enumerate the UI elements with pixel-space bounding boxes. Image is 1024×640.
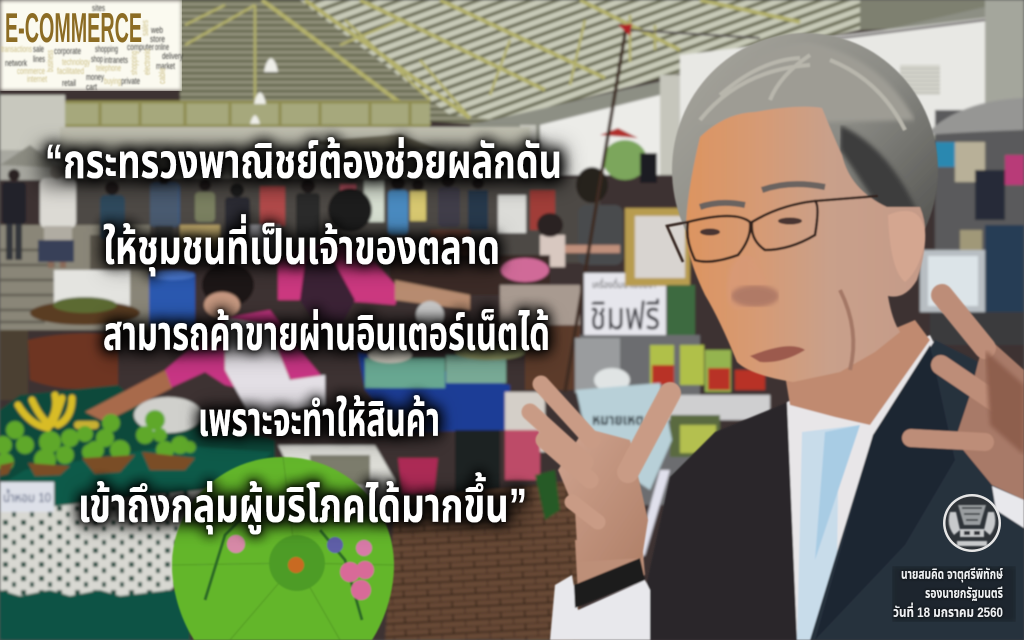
left floor [0,225,150,330]
logo: e-commerce word cloud [0,0,183,92]
blue barrel [149,272,195,328]
pink vendor with apron [85,263,325,433]
quote line 2: ให้ชุมชนที่เป็นเจ้าของตลาด [103,214,500,277]
word cloud words [1,3,183,92]
word cloud words: web [150,25,163,35]
teal sign with text: หมายเหตุ [592,412,644,429]
stall tables mid [390,255,550,295]
shoppers at left [2,165,178,268]
word cloud words: facilitated [57,66,84,76]
credit block [892,566,1016,622]
logo: e-commerce word cloud: E-COMMERCE [5,4,142,51]
roof: gable [178,0,493,126]
roof trusses [185,0,800,125]
free-tasting sign: เครื่องดื่มน้ำเชื่อมชา [592,277,656,291]
text halo bands [40,146,565,528]
vendor woman, right stall [537,167,623,267]
word cloud words: cart [86,82,97,92]
face [686,107,925,382]
word cloud words: online [155,42,169,52]
quote line 5: เข้าถึงกลุ่มผู้บริโภคได้มากขึ้น” [78,472,527,535]
suit: left [636,402,798,640]
tents [1,144,53,168]
crowd band [60,178,600,263]
crowd figures [100,168,555,260]
pink bucket [398,458,438,494]
word cloud words: sales [140,20,150,36]
white crate [278,445,395,520]
right hand [911,295,1024,500]
free-tasting sign: ชิมฟรี [590,296,660,338]
right cuff [992,486,1024,528]
minister figure [530,33,1024,640]
price card: น้ำหอม 10 [3,488,51,505]
pole [565,28,626,392]
word cloud words: market [156,61,175,71]
right stall products [580,335,700,505]
icon: government seal [943,494,1001,552]
glasses [667,196,878,262]
gold framed certificate [625,208,690,286]
word cloud words: corporate [54,46,81,56]
right side stalls [920,98,1024,340]
word cloud words: money [86,72,104,82]
leaves [535,470,560,520]
side wall and beams [468,7,985,141]
quote line 1: “กระทรวงพาณิชย์ต้องช่วยผลักดัน [45,136,562,189]
floor tiles [385,480,580,640]
word cloud words: cable [157,68,167,84]
tie [797,425,860,640]
eyes [700,228,720,236]
word cloud words: retail [62,78,76,88]
word cloud words: internet [27,74,47,84]
word cloud words: sites [92,3,105,13]
blue table and baskets [358,352,510,432]
lower truss [65,101,430,127]
fruit baskets [0,452,195,476]
left hand [530,384,670,562]
headline quote [45,136,562,535]
quote line 4: เพราะจะทำให้สินค้า [198,394,440,447]
word cloud words: shopping [129,51,139,75]
shirt [787,335,935,640]
quote line 3: สามารถค้าขายผ่านอินเตอร์เน็ตได้ [103,308,550,361]
free-tasting sign [584,273,666,338]
woven baskets [30,301,140,325]
word cloud words: electronic [142,49,152,75]
wrist and cuff [550,575,650,640]
neck [785,320,930,425]
flyers under arm [642,468,672,558]
eyebrows [700,184,825,207]
word cloud words: store [150,34,165,44]
word cloud words: telephone [96,63,121,73]
word cloud words: lines [33,54,45,64]
credit date: วันที่ 18 มกราคม 2560 [893,602,1003,620]
price card [0,482,54,512]
teal sign with text [576,383,672,490]
ear [888,211,925,282]
word cloud words: intranets [104,55,128,65]
parasol [172,457,394,640]
word cloud words: sale [33,44,44,54]
word cloud words: technology [62,57,90,67]
hair [672,33,938,307]
bananas and limes [0,395,196,476]
word cloud words: commerce [17,66,45,76]
green basket cloth [0,384,276,481]
parasol flowers [172,457,394,640]
word cloud words: shop [91,54,103,64]
word cloud words: delivery [162,51,183,61]
word cloud words: private [121,76,140,86]
word cloud words: shopping [95,44,118,54]
watch [574,558,645,608]
word cloud words: computer [127,42,154,52]
word cloud words: business [45,50,55,72]
roof: corrugated sheets [300,0,880,120]
suit: right [810,340,1024,640]
lace [0,490,205,596]
word cloud words: network [5,58,27,68]
jars [667,285,695,335]
second pink vendor [276,187,472,320]
pendant lamps [250,58,278,124]
word cloud words: buying [104,76,121,86]
red umbrella and tree [603,140,647,180]
green tablecloth [9,447,270,506]
white box [54,270,130,306]
word cloud words: transactions [1,44,32,54]
